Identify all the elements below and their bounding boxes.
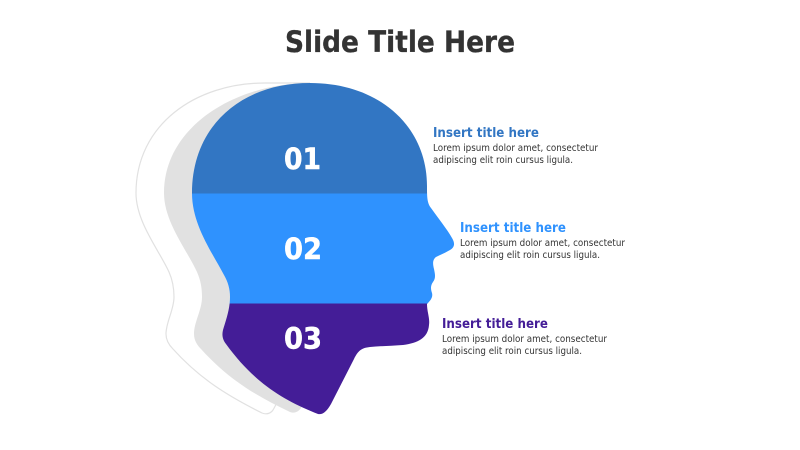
text block 02: adipiscing elit roin cursus ligula. [460,250,600,261]
text block 03: adipiscing elit roin cursus ligula. [442,346,582,357]
text block 03: Insert title here [442,317,548,332]
segment 02 [192,194,454,304]
segment 01 [192,83,428,194]
number 03: 03 [284,322,322,356]
number 01: 01 [284,142,321,176]
text block 02: Insert title here [460,221,566,236]
text block 01: adipiscing elit roin cursus ligula. [433,155,573,166]
text block 01: Lorem ipsum dolor amet, consectetur [433,143,599,154]
text block 03 [442,317,608,357]
segment 03 [222,304,430,414]
text block 02: Lorem ipsum dolor amet, consectetur [460,238,626,249]
title: Slide Title Here [285,25,515,59]
outline head [136,83,310,414]
number 02: 02 [284,232,322,266]
text block 01 [433,126,599,166]
grey shadow head [164,83,320,413]
head diagram [136,83,454,414]
text block 01: Insert title here [433,126,539,141]
text block 02 [460,221,626,261]
text block 03: Lorem ipsum dolor amet, consectetur [442,334,608,345]
